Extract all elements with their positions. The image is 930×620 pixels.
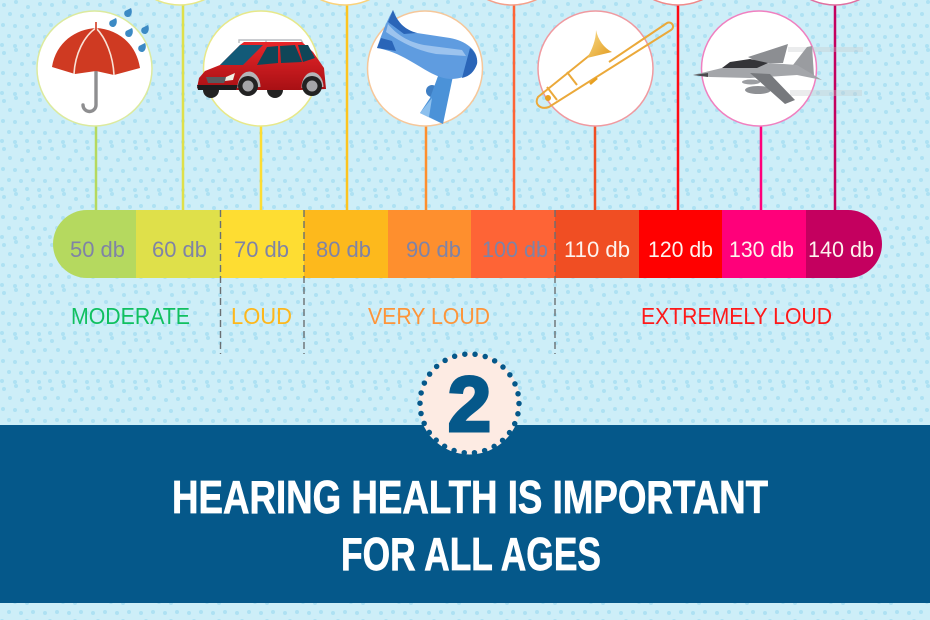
decibel scale bar: 90 db [406, 237, 461, 262]
decibel scale bar: 140 db [808, 237, 874, 262]
icon: fighter jet [693, 11, 863, 126]
section number badge [418, 352, 520, 454]
connector lines [96, 0, 835, 211]
category labels: VERY LOUD [368, 303, 490, 329]
icon: umbrella in rain [37, 8, 152, 126]
section title: FOR ALL AGES [341, 528, 601, 580]
dashed category dividers [220, 210, 555, 354]
decibel scale bar [53, 210, 882, 278]
decibel scale bar: 120 db [648, 237, 713, 262]
decibel scale bar: 50 db [70, 237, 125, 262]
icon: trombone [537, 11, 673, 126]
decibel scale bar: 60 db [152, 237, 207, 262]
decibel scale bar: 100 db [482, 237, 548, 262]
icon: hair dryer [368, 10, 482, 126]
section title [172, 471, 768, 580]
decibel scale bar: 70 db [234, 237, 289, 262]
category labels [71, 303, 832, 329]
decibel scale bar: 130 db [729, 237, 794, 262]
category labels: MODERATE [71, 303, 190, 329]
cropped circles at top edge [122, 0, 892, 5]
heading band [0, 425, 930, 603]
category labels: EXTREMELY LOUD [641, 303, 832, 329]
section title: HEARING HEALTH IS IMPORTANT [172, 471, 768, 523]
decibel scale bar: 80 db [316, 237, 371, 262]
category labels: LOUD [231, 303, 292, 329]
decibel scale bar: 110 db [564, 237, 630, 262]
section number badge: 2 [448, 360, 491, 448]
icon: red car [197, 11, 326, 126]
